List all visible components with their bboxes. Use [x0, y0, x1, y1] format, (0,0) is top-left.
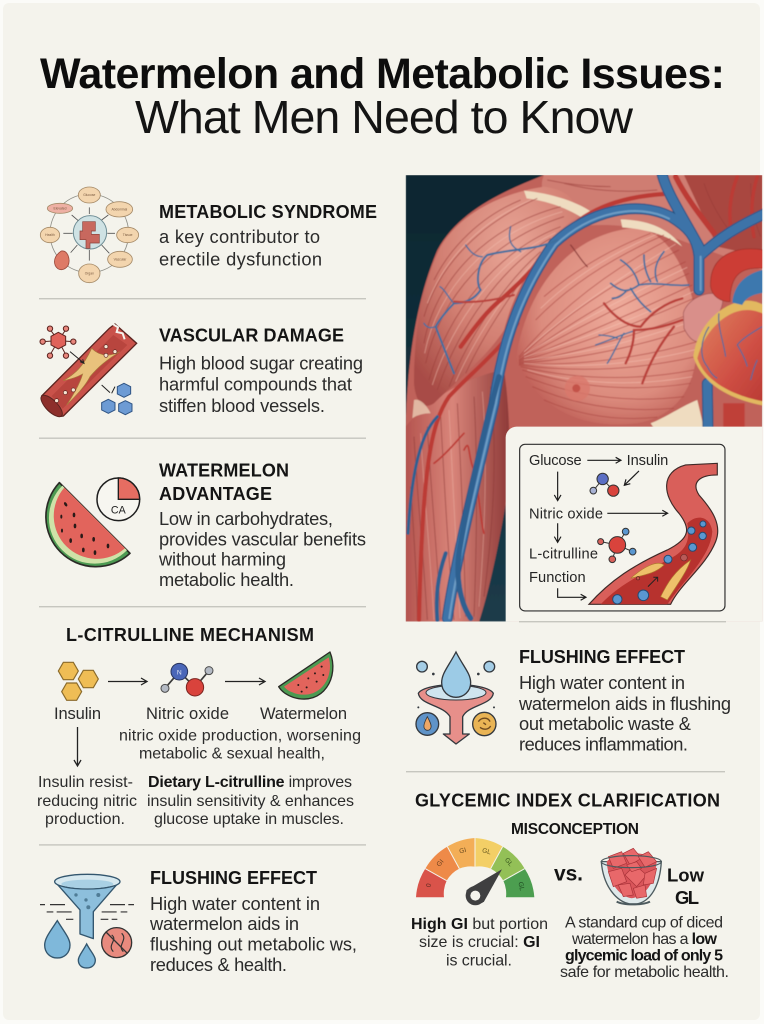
text block: insulin resistance: production. [45, 811, 125, 828]
text block [119, 728, 361, 762]
branch veins [424, 227, 689, 373]
icon: metabolic syndrome network: Tissue [123, 233, 133, 237]
flow diagram [54, 652, 347, 766]
vessel illustration [589, 463, 718, 604]
text block: provides vascular benefits [159, 528, 366, 550]
vs label: vs. [554, 862, 583, 886]
gauge: glycemic index meter: GL [503, 857, 514, 868]
text block: high gi: is crucial. [446, 952, 512, 970]
text block: a key contributor to [159, 226, 320, 247]
icon: metabolic syndrome network: Glucose [83, 193, 96, 197]
icon: metabolic syndrome network: Organ [85, 271, 94, 275]
text block: High water content in [150, 893, 320, 914]
icon: insulin hexagons [58, 662, 98, 700]
heading: L-CITRULLINE MECHANISM [66, 625, 314, 645]
icon: bowl of diced watermelon [601, 848, 661, 904]
pathway labels: L-citrulline [529, 547, 598, 563]
text block: dietary l-citrulline: insulin sensitivity & enhances [147, 793, 354, 810]
pathway labels: Nitric oxide [529, 506, 603, 522]
icon: watermelon slice with carb chart [46, 478, 140, 567]
low gl label [667, 864, 705, 908]
illustration: male chest anatomy with heart [406, 175, 764, 622]
tendons [412, 191, 704, 428]
title: What Men Need to Know [135, 91, 633, 143]
labels: Watermelon [260, 705, 347, 723]
branch arteries [454, 245, 682, 383]
muscle fibres: chest [519, 233, 697, 419]
title [40, 50, 725, 143]
text block: reduces & health. [150, 954, 287, 975]
upper chest and neck [542, 175, 762, 270]
muscle fibres: arm [411, 387, 494, 620]
muscle fibres: deltoid and top [424, 180, 658, 386]
gauge: glycemic index meter: GI [459, 847, 467, 855]
arrow [74, 727, 81, 766]
low gl label: Low [667, 864, 705, 886]
heading: ADVANTAGE [159, 484, 272, 504]
pathway labels: Function [529, 570, 586, 586]
text block: out metabolic waste & [519, 713, 691, 734]
text block: metabolic health. [159, 569, 294, 590]
text block: watermelon aids in flushing [518, 693, 731, 714]
text block [149, 893, 357, 975]
text block: low glycemic load: A standard cup of diced [565, 914, 723, 932]
text block: nitric oxide production, worsening [119, 728, 361, 744]
pectoral muscle [516, 228, 697, 425]
arrow [108, 678, 147, 685]
pathway labels: Glucose [529, 453, 582, 469]
text block: high gi: High GI but portion [411, 916, 548, 933]
arm muscle [406, 370, 509, 622]
text block [159, 226, 322, 270]
icon: drop funnel [416, 652, 496, 744]
panel: vascular damage [38, 324, 363, 420]
text block: metabolic & sexual health, [139, 746, 325, 762]
heart [683, 249, 764, 428]
labels: Nitric oxide [146, 705, 229, 723]
text block: flushing out metabolic ws, [150, 934, 357, 954]
body base [406, 175, 762, 622]
text block: insulin resistance: reducing nitric [37, 793, 137, 810]
text block: dietary l-citrulline: glucose uptake in muscles. [154, 811, 344, 828]
icon: nitric oxide molecule [161, 663, 213, 696]
text block: insulin resistance: Insulin resist- [38, 774, 133, 791]
text block: harmful compounds that [159, 374, 352, 394]
text block: Low in carbohydrates, [159, 508, 333, 529]
panel: flushing effect left [40, 868, 357, 975]
heading [159, 460, 289, 504]
text block: erectile dysfunction [159, 248, 322, 270]
text block: without harming [158, 548, 286, 570]
title: Watermelon and Metabolic Issues: [40, 50, 725, 98]
text block: watermelon aids in [149, 913, 299, 934]
text block [158, 508, 366, 590]
pathway labels [529, 453, 668, 586]
top red arteries [419, 177, 757, 620]
labels: Insulin [54, 705, 101, 723]
text block [518, 672, 731, 754]
text block: low glycemic load: glycemic load of only 5 [565, 948, 723, 964]
text block: dietary l-citrulline: Dietary L-citrulline improves [148, 774, 352, 791]
subheading: MISCONCEPTION [511, 821, 639, 838]
icon: funnel with drops [40, 874, 134, 968]
gauge: glycemic index meter [416, 838, 534, 905]
text block: low glycemic load [560, 914, 729, 981]
text block: High water content in [519, 672, 685, 693]
heading: FLUSHING EFFECT [519, 647, 685, 667]
text block [159, 352, 363, 416]
icon: metabolic syndrome network: Health [45, 233, 55, 237]
main blue veins [408, 175, 764, 620]
icon: watermelon [279, 652, 333, 699]
text block: low glycemic load: safe for metabolic health. [560, 964, 729, 981]
arrow [225, 678, 265, 685]
icon: metabolic syndrome network: Abdominal [111, 207, 127, 211]
icon: metabolic syndrome network: Vascular [114, 257, 127, 261]
deltoid muscle [414, 187, 577, 406]
labels [54, 705, 347, 723]
icon: nitric oxide molecule: N [177, 669, 182, 676]
icon: damaged blood vessel [38, 324, 137, 420]
panel: glycemic index clarification [411, 790, 729, 981]
text block: dietary l-citrulline [147, 774, 354, 828]
heading: METABOLIC SYNDROME [159, 202, 377, 222]
molecules [590, 473, 636, 563]
gauge: glycemic index meter: GL [481, 847, 492, 856]
text block: stiffen blood vessels. [159, 395, 325, 416]
text block: High blood sugar creating [159, 352, 363, 374]
icon: watermelon slice with carb chart: CA [111, 504, 127, 516]
heading: WATERMELON [159, 460, 289, 480]
nipple [565, 376, 590, 401]
gauge: glycemic index meter: 0 [425, 883, 433, 888]
pathway arrows [554, 457, 668, 600]
text block: reduces inflammation. [519, 734, 688, 754]
low gl label: GL [675, 887, 699, 908]
panel: metabolic syndrome [40, 187, 377, 283]
panel: l-citrulline mechanism [37, 625, 361, 828]
icon: metabolic syndrome network: Elevated [54, 207, 67, 211]
text block: insulin resistance [37, 774, 137, 828]
panel: watermelon advantage [46, 460, 366, 590]
gauge: glycemic index meter: GI [436, 858, 446, 868]
text block: low glycemic load: watermelon has a low [571, 931, 718, 948]
panel: flushing effect right [416, 647, 731, 754]
text block: high gi [411, 916, 548, 970]
panel: pathway inset [506, 427, 762, 622]
icon: metabolic syndrome network [40, 187, 139, 283]
heading: GLYCEMIC INDEX CLARIFICATION [415, 790, 720, 810]
gauge: glycemic index meter: GL [517, 881, 525, 892]
heading: VASCULAR DAMAGE [159, 326, 344, 346]
pathway labels: Insulin [627, 453, 668, 469]
heading: FLUSHING EFFECT [150, 868, 317, 888]
text block: high gi: size is crucial: GI [419, 934, 540, 951]
